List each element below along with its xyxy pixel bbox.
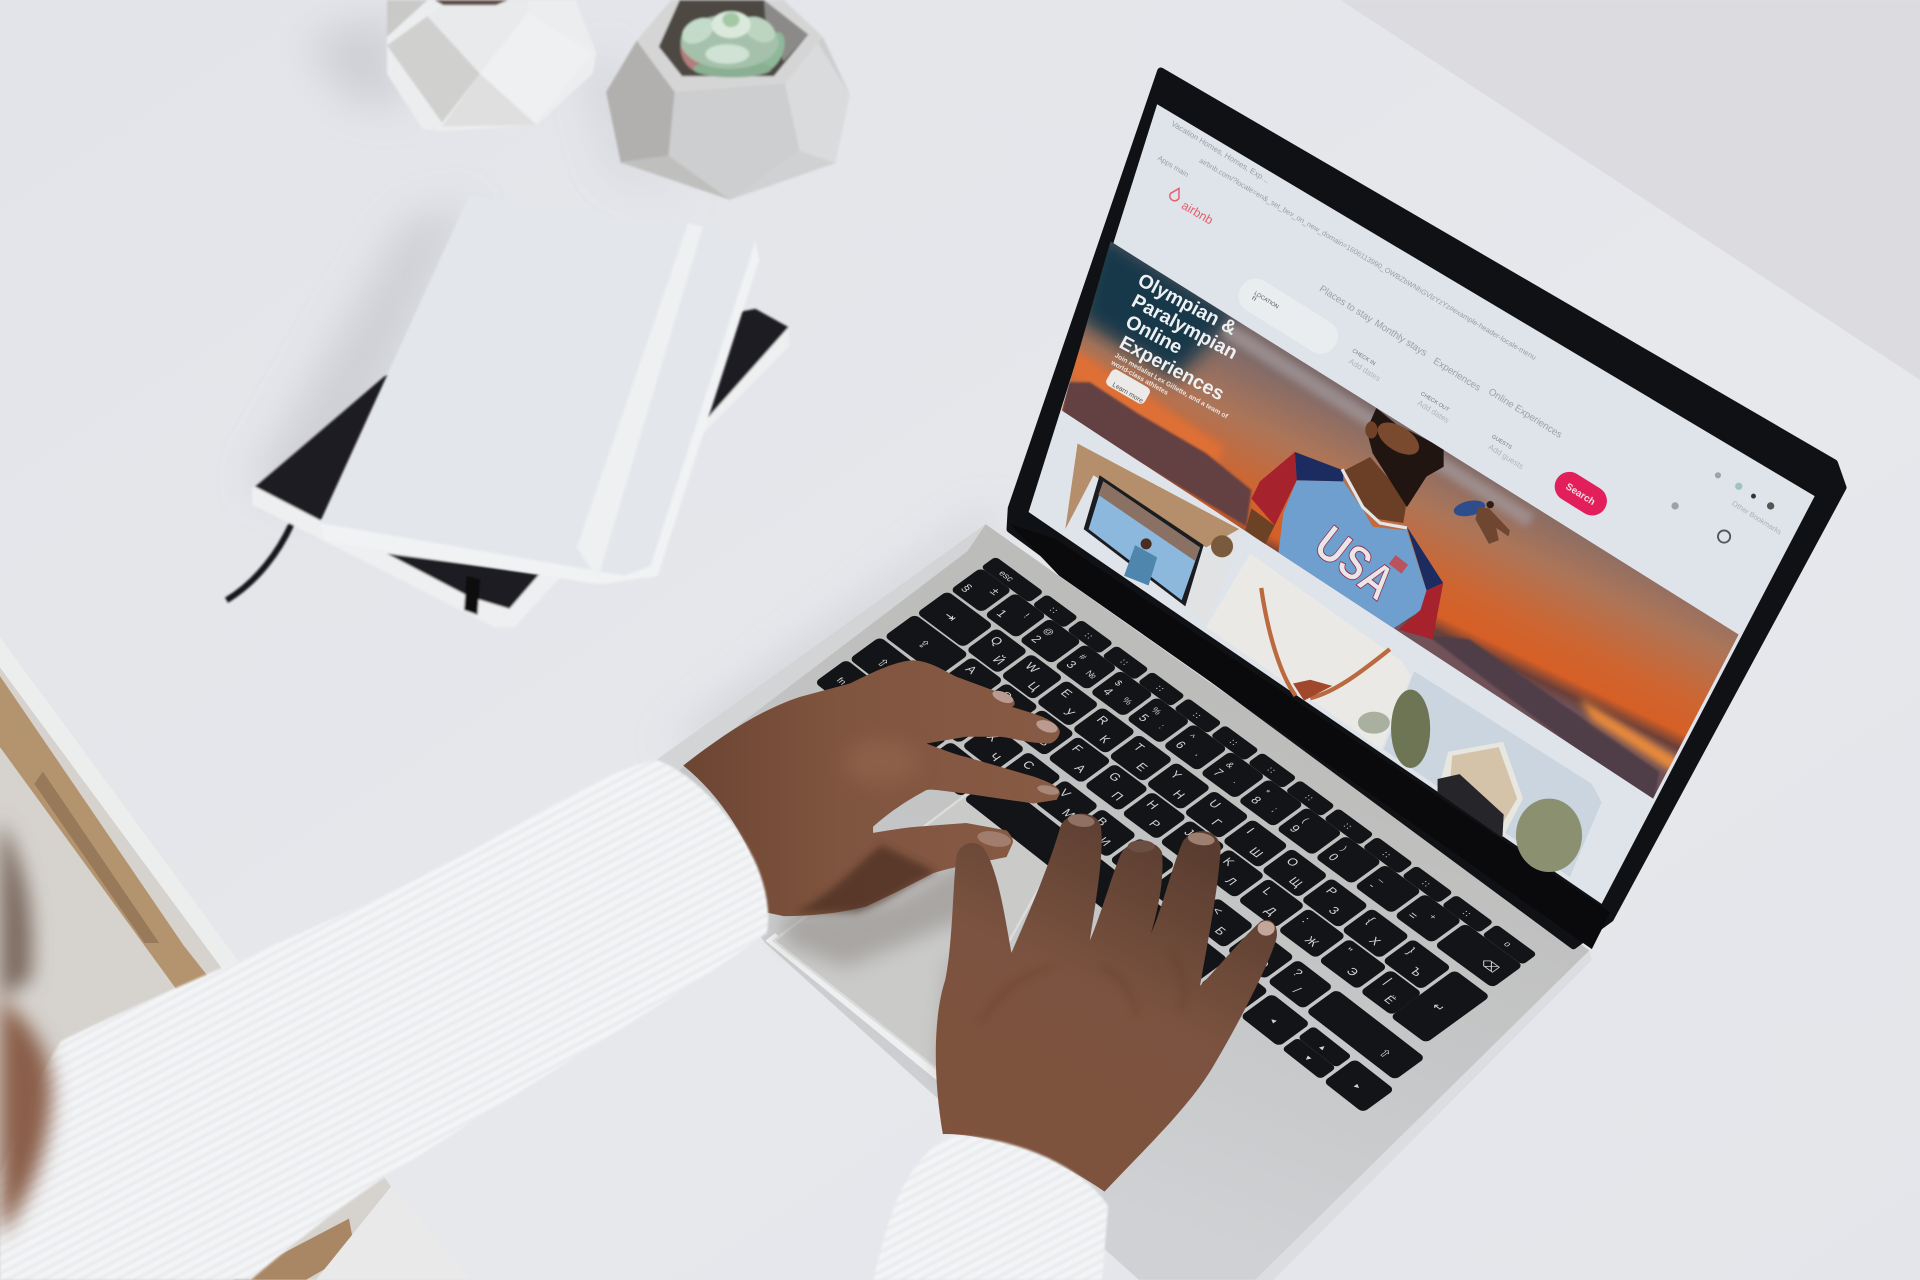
key row: function keys: ∷ xyxy=(1302,793,1315,803)
key row: numbers: # xyxy=(1077,652,1090,662)
hero headline xyxy=(1116,269,1241,405)
key row: numbers: ⌫ xyxy=(1476,956,1502,975)
key row: bottom letters: M xyxy=(1169,874,1189,889)
hero subtext: Join medalist Lex Gillette, and a team of xyxy=(1113,352,1229,421)
key row: QWERTY: Х xyxy=(1366,935,1384,948)
search field: location: LOCATION xyxy=(1253,291,1280,310)
key row: numbers: ^ xyxy=(1186,733,1198,741)
key row: function keys: ∷ xyxy=(1419,879,1432,889)
key row: numbers: 0 xyxy=(1325,851,1342,863)
hero headline: Online xyxy=(1122,311,1186,359)
key row: QWERTY: Щ xyxy=(1286,875,1306,890)
key row: numbers: * xyxy=(1261,788,1273,796)
key row: numbers: 5 xyxy=(1135,712,1152,724)
key row: bottom letters: C xyxy=(1019,758,1038,772)
key row: home row: J xyxy=(1181,826,1197,838)
shadows on desk xyxy=(251,12,1010,747)
key row: home row: П xyxy=(1108,789,1126,803)
trackpad xyxy=(774,794,1053,1069)
key row: function keys: ∷ xyxy=(1117,658,1130,667)
key row: QWERTY: Ъ xyxy=(1407,965,1426,979)
key row: bottom letters: V xyxy=(1056,787,1075,800)
key row: function keys: ∷ xyxy=(1082,631,1095,641)
key row: bottom letters: С xyxy=(1022,778,1040,792)
key row: QWERTY: ⇥ xyxy=(940,609,960,624)
key row: bottom letters: ⇧ xyxy=(873,656,893,670)
knuckle highlight xyxy=(845,740,918,784)
key row: home row: Л xyxy=(1222,875,1240,888)
key row: QWERTY: Y xyxy=(1167,768,1185,782)
key row: numbers: 3 xyxy=(1063,658,1080,671)
key row: function keys: o xyxy=(1502,940,1514,948)
key row: QWERTY: W xyxy=(1022,660,1043,675)
key row: bottom letters: Ь xyxy=(1172,894,1190,907)
front edge highlight xyxy=(765,933,943,1080)
date and guest fields: GUESTS xyxy=(1490,434,1513,451)
key row: numbers: 4 xyxy=(1100,685,1117,698)
hero image xyxy=(1062,227,1739,808)
key row: home row: A xyxy=(962,663,981,677)
key row: numbers: $ xyxy=(1112,679,1125,688)
key row: numbers: & xyxy=(1224,760,1237,770)
key row: numbers: , xyxy=(1193,750,1204,757)
airbnb logo xyxy=(1165,186,1218,227)
key row: QWERTY: I xyxy=(1243,825,1257,836)
background: wall behind desk, upper right xyxy=(1341,0,1920,380)
key row: numbers: ; xyxy=(1270,806,1280,813)
key row: home row: : xyxy=(1299,914,1313,925)
key row: space bar row: ◂ xyxy=(1268,1016,1280,1025)
shadow under lower hand xyxy=(937,955,980,1102)
key row: home row: А xyxy=(1071,762,1090,776)
knuckle shading xyxy=(980,949,1184,1023)
laptop screen xyxy=(1029,104,1815,904)
key row: QWERTY: Й xyxy=(990,653,1009,667)
airbnb logo: airbnb xyxy=(1179,198,1216,227)
key row: bottom letters: Ю xyxy=(1251,955,1272,971)
key row: bottom letters: ? xyxy=(1289,967,1306,979)
key row: home row: F xyxy=(1069,743,1086,755)
left arm xyxy=(1245,508,1275,545)
key row: home row: Ж xyxy=(1302,934,1322,949)
key row: QWERTY: O xyxy=(1283,855,1302,869)
shirt text: USA xyxy=(1305,516,1404,611)
hero subtext: world-class athletes xyxy=(1109,359,1169,397)
key row: QWERTY: E xyxy=(1058,687,1075,700)
key row: home row: H xyxy=(1143,798,1162,812)
key row: home row: D xyxy=(1033,716,1051,729)
key row: bottom letters: X xyxy=(984,731,1001,744)
key row: numbers: № xyxy=(1083,669,1099,681)
sweater sleeve: arm in foreground xyxy=(0,759,768,1280)
neck xyxy=(1344,457,1407,523)
key row: QWERTY: P xyxy=(1323,885,1341,898)
key row: QWERTY: Q xyxy=(987,634,1006,648)
bookmarks bar: Apps main xyxy=(1156,153,1190,179)
card: video call on tablet xyxy=(1065,443,1239,625)
key row: home row: Р xyxy=(1146,818,1164,831)
key row: numbers: : xyxy=(1157,723,1167,730)
flag patch xyxy=(1389,555,1408,574)
date and guest fields: CHECK OUT xyxy=(1419,391,1451,414)
navigation links xyxy=(1317,284,1564,441)
head xyxy=(1367,408,1444,507)
key row: QWERTY: T xyxy=(1130,741,1148,754)
key row: function keys: ∷ xyxy=(1380,850,1393,860)
key row: space bar row: ▸ xyxy=(1352,1082,1364,1091)
search field: location xyxy=(1232,272,1344,360)
soil xyxy=(659,0,808,76)
key row: numbers: % xyxy=(1149,706,1164,716)
laptop xyxy=(637,71,1843,1280)
notebook: white, on top xyxy=(320,196,759,584)
key row: home row: S xyxy=(997,689,1015,702)
key row: bottom letters: > xyxy=(1249,935,1266,948)
key row: numbers: _ xyxy=(1378,873,1391,883)
key row: numbers: + xyxy=(1427,912,1439,921)
floor and chair below the desk edge xyxy=(0,637,471,1280)
key row: function keys: ∷ xyxy=(1047,606,1060,615)
date and guest fields: Add dates xyxy=(1347,357,1382,383)
fingernails xyxy=(991,688,1015,706)
hero headline: Paralympian xyxy=(1128,290,1241,364)
key row: bottom letters: B xyxy=(1093,815,1111,828)
key row: numbers xyxy=(953,570,1520,986)
screen: white page background xyxy=(1029,104,1815,904)
key row: bottom letters: < xyxy=(1209,905,1226,917)
date and guest fields: Add guests xyxy=(1487,442,1525,471)
elastic band xyxy=(464,576,480,615)
navigation links: Online Experiences xyxy=(1486,386,1564,441)
key row: home row: Ф xyxy=(965,683,984,696)
key row: bottom letters: Я xyxy=(950,723,969,737)
key row: home row: G xyxy=(1105,770,1124,784)
key row: numbers: . xyxy=(1231,777,1241,785)
card: house among trees xyxy=(1384,671,1602,877)
collar xyxy=(1342,469,1407,528)
hero: horizon silhouette right xyxy=(1427,634,1659,808)
key row: QWERTY: З xyxy=(1325,904,1343,917)
key row: bottom letters xyxy=(852,639,1422,1078)
date and guest fields xyxy=(1347,348,1525,471)
date and guest fields: Add dates xyxy=(1416,398,1451,425)
key row: home row: О xyxy=(1184,846,1202,860)
hero: pale haze band xyxy=(1224,328,1531,521)
key row: bottom letters: Т xyxy=(1134,865,1152,878)
learn more button xyxy=(1104,368,1152,406)
key row: bottom letters: ⇧ xyxy=(1375,1046,1395,1061)
upper hand xyxy=(683,660,1060,916)
browser address bar: airbnb.com/?locale=en&_set_bev_on_new_domain=1606113990_OWBZbWNhGVlzYzYz#example-header-locale-menu xyxy=(1198,156,1538,362)
key row: function keys: ∷ xyxy=(1265,766,1277,775)
key row: bottom letters: Б xyxy=(1212,925,1229,938)
left sleeve xyxy=(1251,452,1297,526)
bookmarks text: Other Bookmarks xyxy=(1730,499,1784,537)
key row: numbers: 2 xyxy=(1028,633,1045,645)
toolbar icons xyxy=(1671,472,1774,510)
key row: function keys: ∷ xyxy=(1227,738,1240,747)
key row: numbers: - xyxy=(1365,880,1379,891)
key row: QWERTY: К xyxy=(1096,733,1114,746)
key row: QWERTY: Е xyxy=(1133,760,1151,774)
key row: numbers: 7 xyxy=(1210,766,1227,779)
key row: numbers: % xyxy=(1120,696,1135,706)
browser tab title: Vacation Homes, Homes, Exp… xyxy=(1170,119,1271,185)
key row: home row: Ё xyxy=(1381,993,1399,1006)
key row: function keys xyxy=(984,559,1534,963)
right sleeve xyxy=(1398,583,1443,639)
key row: numbers: § xyxy=(958,582,975,594)
key row: numbers: @ xyxy=(1041,626,1056,637)
key row: bottom letters: Ч xyxy=(986,750,1004,764)
pot: white faceted planter xyxy=(387,0,596,131)
key row: QWERTY: Н xyxy=(1170,788,1188,801)
search button: Search xyxy=(1563,481,1597,508)
key row: space bar row: fn xyxy=(834,676,849,686)
key row: numbers: 9 xyxy=(1286,823,1303,835)
small jumping figure xyxy=(1452,498,1510,544)
elastic closure xyxy=(577,223,703,579)
key row: numbers: ± xyxy=(987,585,1004,598)
key row: numbers: ) xyxy=(1339,845,1349,853)
shirt body xyxy=(1278,480,1427,628)
bookmark ribbon xyxy=(227,524,291,600)
key row: QWERTY: У xyxy=(1060,706,1078,719)
hero: sun streak xyxy=(1580,698,1684,772)
date and guest fields: CHECK IN xyxy=(1351,348,1376,367)
person: blurred face at left edge xyxy=(0,821,52,1237)
key row: QWERTY: { xyxy=(1363,915,1378,926)
navigation links: Places to stay xyxy=(1317,284,1375,325)
search field: location: ri xyxy=(1250,293,1259,303)
key row: bottom letters: И xyxy=(1095,835,1114,849)
key row: home row: Э xyxy=(1343,965,1362,979)
hero: left sun glow xyxy=(1070,348,1224,461)
learn more button: Learn more xyxy=(1111,382,1144,405)
key row: numbers: = xyxy=(1404,909,1421,922)
key row: QWERTY: Г xyxy=(1208,817,1225,829)
pot: grey concrete planter with succulent xyxy=(606,0,850,200)
notebook: black, underneath xyxy=(227,309,789,627)
key row: QWERTY: Ш xyxy=(1246,845,1266,860)
hero headline: Olympian & xyxy=(1134,269,1240,340)
key row: function keys: ∷ xyxy=(1341,822,1354,831)
key row: space bar row: ▾ xyxy=(1302,1054,1314,1063)
keyboard xyxy=(817,559,1534,1111)
lower hand xyxy=(936,813,1277,1192)
key row: home row: L xyxy=(1259,885,1276,897)
key row: home row: | xyxy=(1381,976,1395,986)
key row: bottom letters: / xyxy=(1290,985,1304,996)
thumb shadow xyxy=(796,845,937,912)
athlete xyxy=(1245,408,1444,639)
hero: horizon silhouette left xyxy=(1062,382,1251,527)
hinge xyxy=(1010,524,1610,949)
sweater cuff: second arm xyxy=(873,1136,1108,1280)
card: hammock xyxy=(1206,554,1411,750)
key row: QWERTY: } xyxy=(1404,945,1419,956)
key row: numbers: 8 xyxy=(1248,794,1265,807)
key row: function keys: ∷ xyxy=(1153,684,1166,693)
shadow under upper hand on trackpad xyxy=(784,857,980,968)
base left bevel xyxy=(637,524,986,784)
fingertips xyxy=(1067,813,1095,829)
laptop base xyxy=(637,524,1589,1280)
key row: function keys: esc xyxy=(997,569,1016,583)
laptop lid xyxy=(1010,71,1843,946)
key row: bottom letters: Z xyxy=(948,703,965,716)
key row: QWERTY: Ц xyxy=(1024,680,1043,693)
navigation links: Experiences xyxy=(1431,356,1483,394)
key row: QWERTY: U xyxy=(1206,797,1224,811)
navigation links: Monthly stays xyxy=(1372,318,1429,359)
user avatar icon xyxy=(1718,530,1730,543)
key row: QWERTY: ↵ xyxy=(1428,1000,1448,1015)
key row: bottom letters: М xyxy=(1059,807,1078,821)
key row: home row: Д xyxy=(1262,904,1280,918)
key row: QWERTY: R xyxy=(1093,713,1112,727)
key row: function keys: ∷ xyxy=(1190,711,1203,720)
key row: numbers: ! xyxy=(1021,612,1032,619)
hero: dark top-left corner xyxy=(1078,227,1237,380)
key row: home row: Ы xyxy=(1000,709,1020,723)
key row: home row: ⇪ xyxy=(914,637,933,651)
key row: numbers: 6 xyxy=(1172,739,1189,751)
key row: bottom letters: N xyxy=(1132,845,1150,859)
key row: home row: K xyxy=(1220,855,1237,868)
key row: function keys: ∷ xyxy=(1460,909,1473,918)
key row: numbers: 1 xyxy=(993,607,1010,620)
icon: succulent xyxy=(675,11,790,77)
hero headline: Experiences xyxy=(1116,332,1228,405)
navy shoulders xyxy=(1295,452,1343,481)
key row: home row: " xyxy=(1341,946,1355,956)
key row: space bar row xyxy=(817,661,1392,1111)
key row: home row: В xyxy=(1036,735,1053,748)
key row: numbers: ( xyxy=(1300,816,1311,824)
key row: QWERTY xyxy=(886,593,1487,1041)
search button xyxy=(1549,466,1612,521)
key row: space bar row: ▴ xyxy=(1317,1043,1329,1052)
key row: home row xyxy=(887,616,1420,1013)
pot body xyxy=(606,0,850,200)
